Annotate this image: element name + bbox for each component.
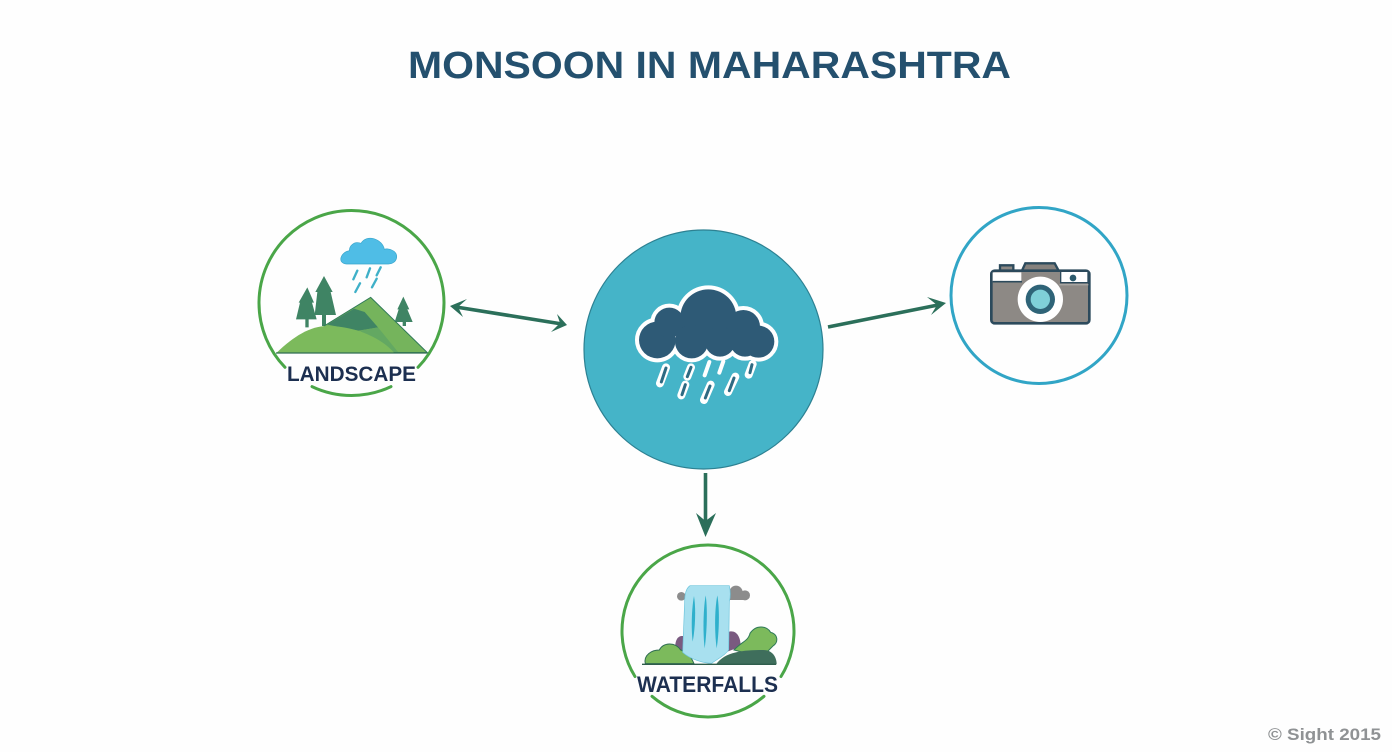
icon: camera xyxy=(991,263,1089,323)
title: MONSOON IN MAHARASHTRA xyxy=(408,45,1011,87)
camera left window xyxy=(993,272,1021,281)
icon: purple rocks xyxy=(675,636,685,652)
arrow: monsoon to waterfalls xyxy=(696,473,716,537)
camera circle outline xyxy=(951,208,1127,384)
icon: landscape scene xyxy=(276,238,427,353)
icon: cloud white outline xyxy=(639,289,774,358)
label: waterfalls: WATERFALLS xyxy=(637,672,778,697)
icon: back mountain xyxy=(324,297,427,353)
panel: camera xyxy=(951,208,1127,384)
icon: ground line xyxy=(642,662,776,666)
panel: landscape xyxy=(259,211,444,395)
icon: dark cloud xyxy=(639,289,774,358)
icon: storm cloud with rain xyxy=(639,289,774,400)
icon: waterfall scene xyxy=(642,586,777,664)
label: landscape: LANDSCAPE xyxy=(287,363,416,386)
icon: dark ground xyxy=(716,650,777,664)
camera top hump xyxy=(1022,263,1059,287)
icon: rain drops xyxy=(353,267,381,292)
icon: water streaks xyxy=(692,595,719,648)
icon: blue rain cloud xyxy=(341,238,397,264)
landscape circle outline xyxy=(259,211,444,395)
arrow: landscape to monsoon (double headed) xyxy=(450,299,567,332)
waterfalls circle outline xyxy=(622,545,794,717)
panel: waterfalls xyxy=(622,545,794,717)
icon: ground line xyxy=(276,351,427,355)
panel: central monsoon circle xyxy=(584,230,823,469)
icon: water curtain xyxy=(683,586,730,663)
copyright note: © Sight 2015 xyxy=(1268,725,1381,744)
icon: pine trees xyxy=(296,276,413,327)
icon: rain drops xyxy=(660,364,753,400)
camera body xyxy=(991,271,1089,323)
arrow: monsoon to camera xyxy=(828,297,946,327)
icon: right bush xyxy=(734,627,777,652)
camera viewfinder bump xyxy=(1000,265,1013,271)
camera right window xyxy=(1061,271,1088,283)
icon: left bush xyxy=(645,644,694,664)
camera lens xyxy=(1018,277,1063,322)
icon: mountain shadow xyxy=(327,309,378,331)
central teal disc xyxy=(584,230,823,469)
icon: front hill xyxy=(277,326,394,353)
icon: grey clouds xyxy=(677,586,750,601)
